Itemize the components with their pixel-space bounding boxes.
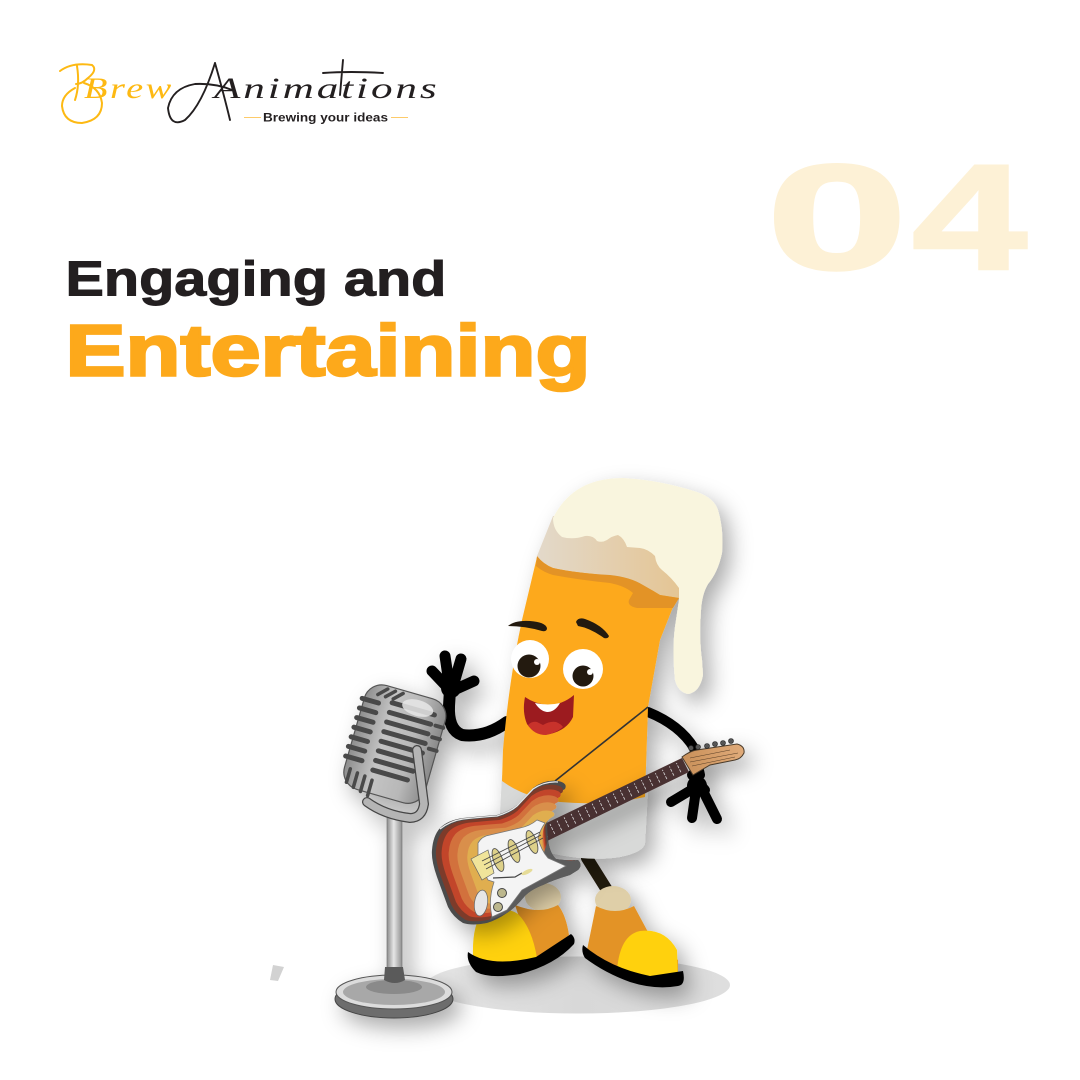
left arm and waving hand — [432, 656, 507, 735]
large step number 04: 4 — [912, 134, 1027, 301]
mascot body glass — [500, 478, 722, 859]
empty glass bottom — [500, 775, 648, 859]
heading line: Engaging and: Engaging and — [66, 252, 446, 306]
microphone yoke — [367, 750, 424, 818]
guitar body sunburst — [432, 781, 580, 924]
logo wordmark: Animations: Animations — [211, 72, 440, 105]
logo tagline: Brewing your ideas — [263, 112, 388, 124]
stand base — [335, 967, 453, 1018]
illustration: beer mascot — [335, 478, 744, 1018]
microphone head — [337, 680, 450, 810]
grille slots — [337, 683, 449, 810]
right arm and hand — [648, 712, 717, 819]
electric guitar — [432, 738, 744, 924]
left shoe — [468, 883, 575, 976]
dark beer band — [536, 556, 679, 608]
foam — [553, 478, 722, 694]
ground shadow — [426, 956, 730, 1014]
logo: Brew Animations — [60, 60, 440, 124]
mascot face — [508, 618, 609, 735]
logo flourish: yellow loop — [60, 64, 102, 123]
foam shadow band — [537, 510, 680, 598]
right eye — [563, 649, 603, 689]
microphone on stand — [335, 680, 453, 1018]
small grey mark — [270, 965, 284, 981]
large step number 04: 0 — [766, 134, 908, 301]
smiling mouth — [524, 695, 574, 735]
guitar pickguard — [478, 820, 566, 917]
beer fill — [502, 557, 679, 803]
guitar neck — [532, 758, 689, 843]
mascot arms and legs — [432, 656, 717, 898]
guitar strings — [690, 750, 738, 766]
heading line: Entertaining: Entertaining — [66, 311, 590, 391]
right shoe — [582, 886, 684, 987]
logo wordmark: Brew: Brew — [84, 72, 174, 105]
legs — [536, 858, 612, 898]
mascot feet — [468, 883, 684, 987]
large step number 04 — [766, 134, 1027, 301]
guitar pickups and bridge — [471, 829, 543, 917]
guitar strap — [555, 707, 648, 781]
eyebrows — [508, 618, 609, 638]
stand pole — [387, 815, 402, 970]
guitar headstock — [682, 738, 744, 775]
left eye — [511, 640, 549, 678]
logo flourish: black loop — [168, 60, 383, 122]
